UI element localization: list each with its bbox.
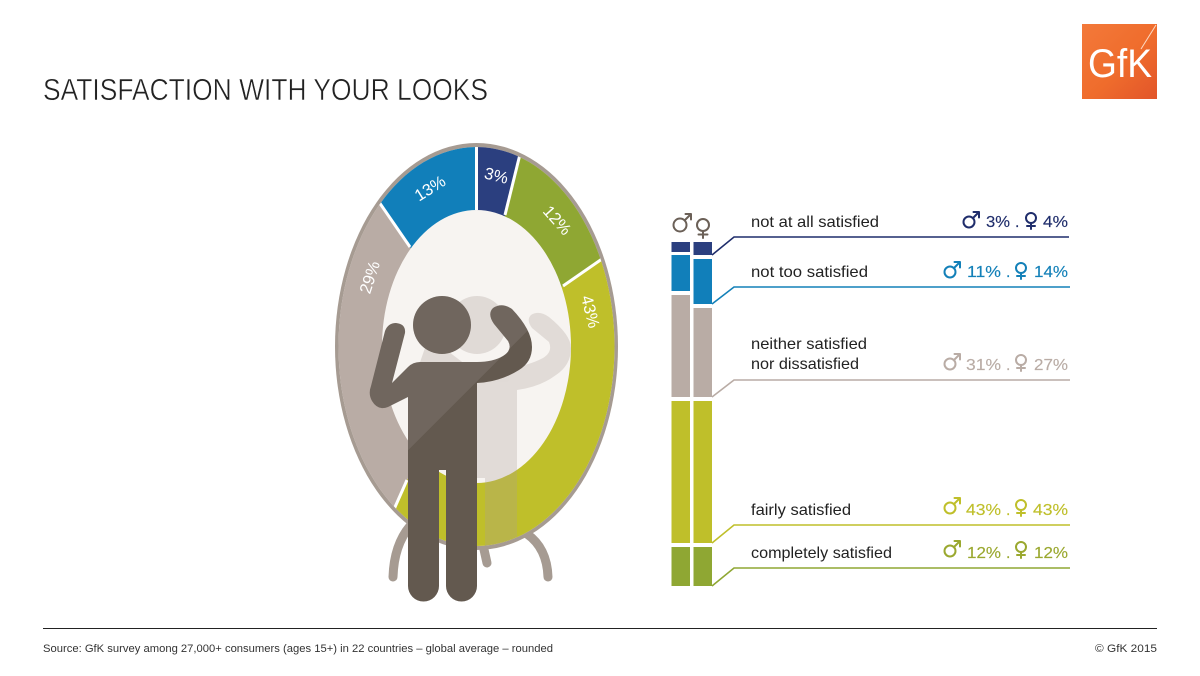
row: fairly satisfied: 43%: [1033, 502, 1068, 519]
logo: GfK: GfK: [1088, 42, 1152, 86]
row: completely satisfied: .: [1006, 545, 1010, 562]
row: neither satisfied nor dissatisfied: 31%: [966, 357, 1001, 374]
mirror frame: [335, 143, 618, 550]
mirror illustration: [335, 143, 618, 602]
row: fairly satisfied: fairly satisfied: [751, 502, 851, 519]
person looking in mirror: [370, 296, 532, 602]
row: neither satisfied nor dissatisfied: [712, 336, 1070, 397]
row: not too satisfied: [712, 262, 1070, 304]
row: not too satisfied: 11%: [967, 264, 1001, 281]
row: neither satisfied nor dissatisfied: 27%: [1034, 357, 1068, 374]
title: SATISFACTION WITH YOUR LOOKS: [43, 73, 488, 107]
row: not too satisfied: .: [1006, 264, 1010, 281]
source note: Source: GfK survey among 27,000+ consumers (ages 15+) in 22 countries – global average – rounded: [43, 643, 553, 655]
row: not at all satisfied: not at all satisfied: [751, 214, 879, 231]
icon: female: [697, 219, 709, 238]
ring chart percentage labels: 13%: [412, 172, 449, 205]
bar: male: [672, 242, 690, 586]
row: not at all satisfied: .: [1015, 214, 1019, 231]
ring chart percentage labels: 3%: [482, 165, 510, 188]
ring chart segments: [338, 147, 614, 546]
row: completely satisfied: 12%: [967, 545, 1001, 562]
ring chart percentage labels: 29%: [357, 259, 384, 296]
body, arms and legs: [370, 305, 532, 602]
row: neither satisfied nor dissatisfied: neither satisfied: [751, 336, 867, 353]
row: not too satisfied: 14%: [1034, 264, 1068, 281]
row: fairly satisfied: .: [1006, 502, 1010, 519]
row: not too satisfied: not too satisfied: [751, 264, 868, 281]
row: not at all satisfied: 4%: [1043, 214, 1068, 231]
row: neither satisfied nor dissatisfied: .: [1006, 357, 1010, 374]
reflection of person: [420, 296, 571, 546]
icon: male: [674, 214, 691, 232]
row: completely satisfied: [712, 541, 1070, 586]
gender header symbols: [674, 214, 709, 238]
ring chart percentage labels: [357, 165, 603, 330]
row: neither satisfied nor dissatisfied: nor dissatisfied: [751, 356, 859, 373]
bar: female: [694, 242, 712, 586]
copyright: © GfK 2015: [1095, 643, 1157, 655]
mirror glass: [338, 147, 614, 546]
mirror stand legs: [393, 526, 548, 577]
row: fairly satisfied: [712, 498, 1070, 543]
row: fairly satisfied: 43%: [966, 502, 1001, 519]
row: completely satisfied: 12%: [1034, 545, 1068, 562]
row: completely satisfied: completely satisfied: [751, 545, 892, 562]
stacked bars: [672, 242, 712, 586]
ring chart percentage labels: 12%: [539, 202, 575, 239]
row: not at all satisfied: [712, 212, 1069, 255]
row: not at all satisfied: 3%: [986, 214, 1010, 231]
logo: GfK: [1082, 24, 1157, 99]
head: [413, 296, 471, 354]
ring chart percentage labels: 43%: [577, 294, 603, 330]
